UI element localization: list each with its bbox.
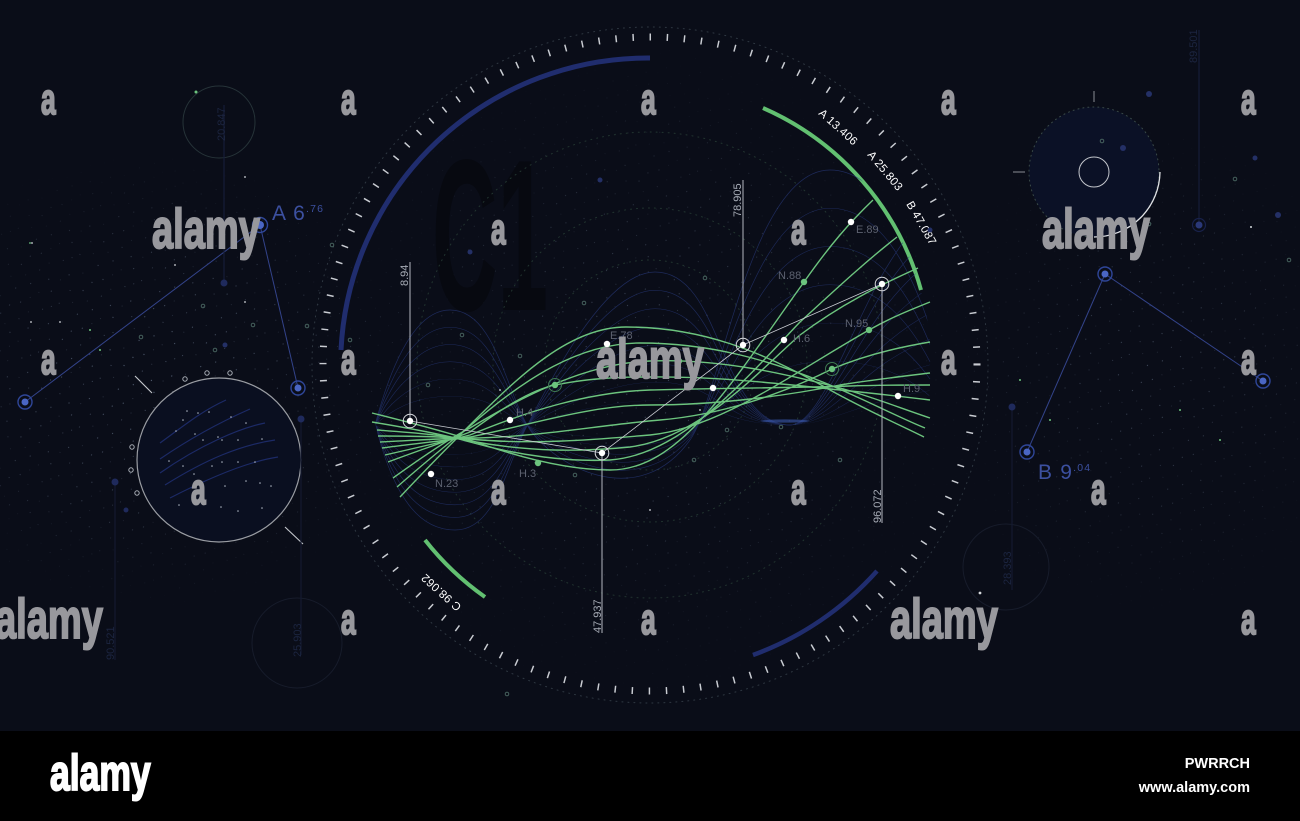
bottom black bar (0, 731, 1300, 821)
chart: vertical value lines (410, 180, 882, 633)
particle field: left (0, 168, 392, 588)
arc: green top-right (763, 108, 921, 290)
panel: lower-right gauge 28.393 (963, 404, 1049, 610)
curved labels (420, 107, 938, 613)
watermark: small a marks: a (941, 334, 956, 384)
watermark: small a marks: a (341, 74, 356, 124)
value 25.903: 25.903 (292, 623, 304, 657)
inner ring (1079, 157, 1109, 187)
panel: top-left small gauge 20.847 (183, 86, 255, 286)
watermark: alamy words: alamy (890, 589, 998, 651)
chart: point labels: N.23 (435, 478, 458, 490)
panel: left large circle with particles (129, 371, 303, 544)
value 96.072: 96.072 (872, 489, 884, 523)
watermark: small a marks (41, 74, 1256, 644)
bar url: www.alamy.com (1138, 780, 1250, 796)
panel: left network A 6.76 (18, 202, 324, 409)
panel: top-right vertical line 89.501 (1188, 29, 1206, 232)
white quadrant arc (1094, 172, 1160, 237)
value 28.393: 28.393 (1002, 551, 1014, 585)
ring: tick marks (323, 37, 977, 691)
watermark: small a marks: a (641, 74, 656, 124)
arc: blue top-left (341, 58, 650, 350)
particle field: centre (366, 80, 936, 662)
chart: point labels: N.88 (778, 270, 801, 282)
network lines (1027, 274, 1263, 452)
watermark: small a marks: a (341, 334, 356, 384)
chart: blue trough highlight (761, 419, 809, 423)
watermark: small a marks: a (641, 594, 656, 644)
watermark: small a marks: a (341, 594, 356, 644)
panel: top-right radar gauge (1013, 91, 1160, 237)
chart: green data points (535, 279, 872, 466)
small rings around the circle (129, 371, 232, 495)
network nodes (18, 218, 305, 409)
watermark: alamy words (0, 199, 1150, 651)
label C 98.062: C 98.062 (420, 571, 464, 613)
chart: point labels: H.6 (793, 333, 810, 345)
ring: outer dotted (312, 27, 988, 703)
chart: blue wave families (375, 170, 930, 530)
chart: point labels: H.3 (519, 468, 536, 480)
arc: green bottom-left (425, 540, 485, 597)
value 47.937: 47.937 (592, 599, 604, 633)
watermark: small a marks: a (191, 464, 206, 514)
value 8.94: 8.94 (399, 265, 411, 286)
label B 9.04: .04 (1073, 462, 1091, 474)
label A 25.803: A 25.803 (865, 149, 905, 194)
watermark: small a marks: a (41, 334, 56, 384)
watermark: small a marks: a (491, 464, 506, 514)
watermark: small a marks: a (1241, 594, 1256, 644)
watermark: small a marks: a (491, 204, 506, 254)
chart: point labels: N.95 (845, 318, 868, 330)
panel: left lower line 90.521 (105, 478, 128, 660)
watermark: small a marks: a (1091, 464, 1106, 514)
particle field: right (954, 158, 1298, 590)
chart: value labels (399, 183, 884, 633)
bar image id: PWRRCH (1185, 756, 1250, 772)
label A 6.76: A 6 (272, 202, 306, 225)
label A 6.76: .76 (306, 203, 324, 215)
chart: point labels: E.78 (610, 330, 633, 342)
watermark: small a marks: a (1241, 334, 1256, 384)
bar logo: alamy (50, 746, 151, 802)
value 78.905: 78.905 (732, 183, 744, 217)
watermark: small a marks: a (1241, 74, 1256, 124)
panel: bottom-left gauge 25.903 (252, 416, 342, 688)
watermark: small a marks: a (791, 464, 806, 514)
watermark: small a marks: a (791, 204, 806, 254)
watermark: small a marks: a (941, 74, 956, 124)
chart: white data points (428, 219, 901, 477)
chart: thin white connector line (410, 284, 882, 453)
value 20.847: 20.847 (216, 107, 228, 141)
chart: point labels: E.89 (856, 224, 879, 236)
chart: point labels: H.9 (903, 383, 920, 395)
chart: point labels: H.4 (516, 407, 533, 419)
ring: inner dotted rings (417, 132, 883, 598)
panel: right network B 9.04 (1020, 267, 1270, 484)
large dim heading C1: C1 (432, 116, 548, 357)
circle ticks (135, 376, 303, 544)
network nodes (1020, 267, 1270, 459)
value 89.501: 89.501 (1188, 29, 1200, 63)
inner particles (168, 410, 272, 512)
label B 9.04: B 9 (1038, 461, 1073, 484)
scattered rings and dots (29, 91, 1291, 696)
arc: blue bottom-right (753, 571, 877, 655)
chart: green curves (372, 200, 930, 497)
chart: ringed white nodes (403, 277, 889, 460)
chart: point labels (435, 224, 920, 490)
watermark: alamy words: alamy (596, 329, 704, 391)
watermark: small a marks: a (41, 74, 56, 124)
label B 47.087: B 47.087 (903, 200, 938, 247)
watermark: alamy words: alamy (152, 199, 260, 261)
inner streaks (160, 400, 278, 498)
label A 13.406: A 13.406 (816, 107, 860, 148)
value: 90.521 (105, 626, 117, 660)
gauge ticks (1013, 91, 1094, 172)
watermark: alamy words: alamy (1042, 199, 1150, 261)
network lines (25, 225, 298, 402)
